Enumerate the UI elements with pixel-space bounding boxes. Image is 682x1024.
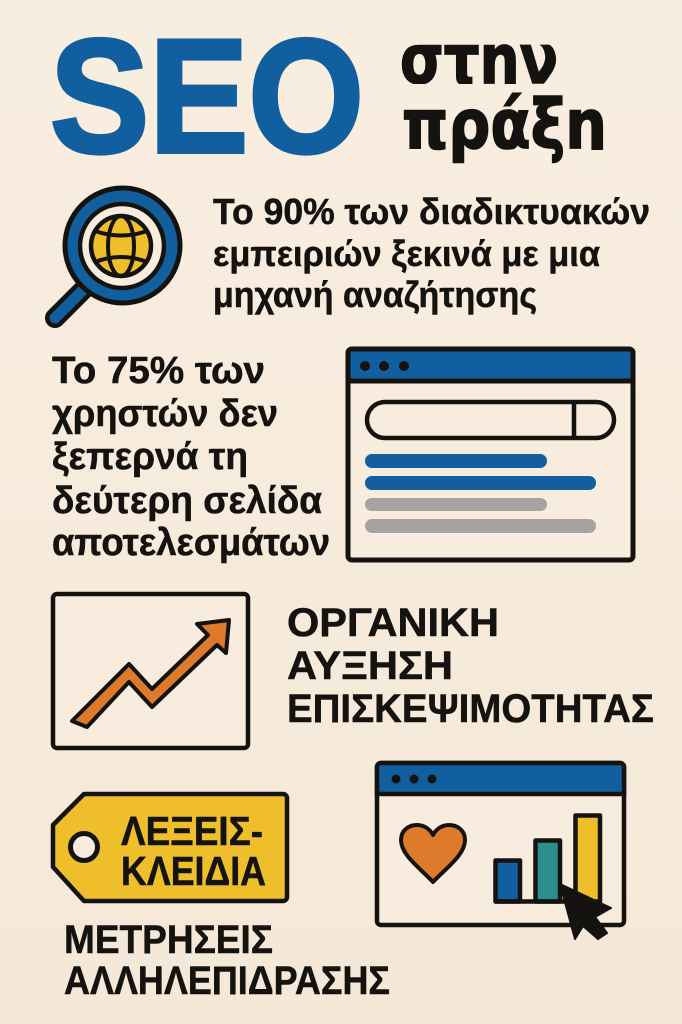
icon: magnifying glass with globe: [55, 188, 180, 318]
text: 75% statistic: Το 75% των: [52, 350, 265, 392]
heart: [401, 825, 465, 882]
text: 75% statistic: αποτελεσμάτων: [52, 522, 330, 564]
browser header: [377, 763, 624, 794]
text: 75% statistic: ξεπερνά τη: [52, 436, 248, 478]
bar chart: [495, 816, 600, 902]
tag label: ΚΛΕΙΔΙΑ: [121, 848, 266, 894]
title: [52, 36, 604, 164]
icon: browser window with heart and bars: [377, 763, 624, 939]
text: organic traffic growth: ΟΡΓΑΝΙΚΗ: [287, 601, 499, 645]
text: engagement metrics: ΜΕΤΡΗΣΕΙΣ: [64, 918, 273, 962]
text: 75% statistic: [52, 350, 330, 564]
cursor: [560, 884, 611, 939]
browser header: [348, 349, 633, 381]
result lines: [365, 454, 596, 533]
icon: keyword tag: [53, 794, 287, 901]
text: 90% statistic: [213, 191, 650, 315]
title: SEO: SEO: [50, 6, 364, 187]
tag label: ΛΕΞΕΙΣ-: [121, 808, 263, 854]
text: 75% statistic: χρηστών δεν: [52, 393, 278, 435]
text: 90% statistic: εμπειριών ξεκινά με μια: [213, 233, 600, 274]
text: organic traffic growth: ΕΠΙΣΚΕΨΙΜΟΤΗΤΑΣ: [287, 687, 654, 731]
text: organic traffic growth: [287, 601, 654, 731]
icon: growth chart with arrow: [53, 594, 248, 748]
text: engagement metrics: [64, 918, 390, 1003]
text: 90% statistic: Το 90% των διαδικτυακών: [213, 191, 650, 232]
tag label: [121, 808, 266, 894]
title: πράξη: πράξη: [402, 85, 607, 165]
text: 75% statistic: δεύτερη σελίδα: [52, 480, 322, 522]
text: 90% statistic: μηχανή αναζήτησης: [213, 274, 537, 315]
icon: browser window with search bar: [348, 349, 633, 560]
text: organic traffic growth: ΑΥΞΗΣΗ: [287, 644, 453, 688]
title: στην: στην: [400, 20, 558, 100]
text: engagement metrics: ΑΛΛΗΛΕΠΙΔΡΑΣΗΣ: [64, 959, 390, 1003]
search bar: [367, 402, 614, 438]
